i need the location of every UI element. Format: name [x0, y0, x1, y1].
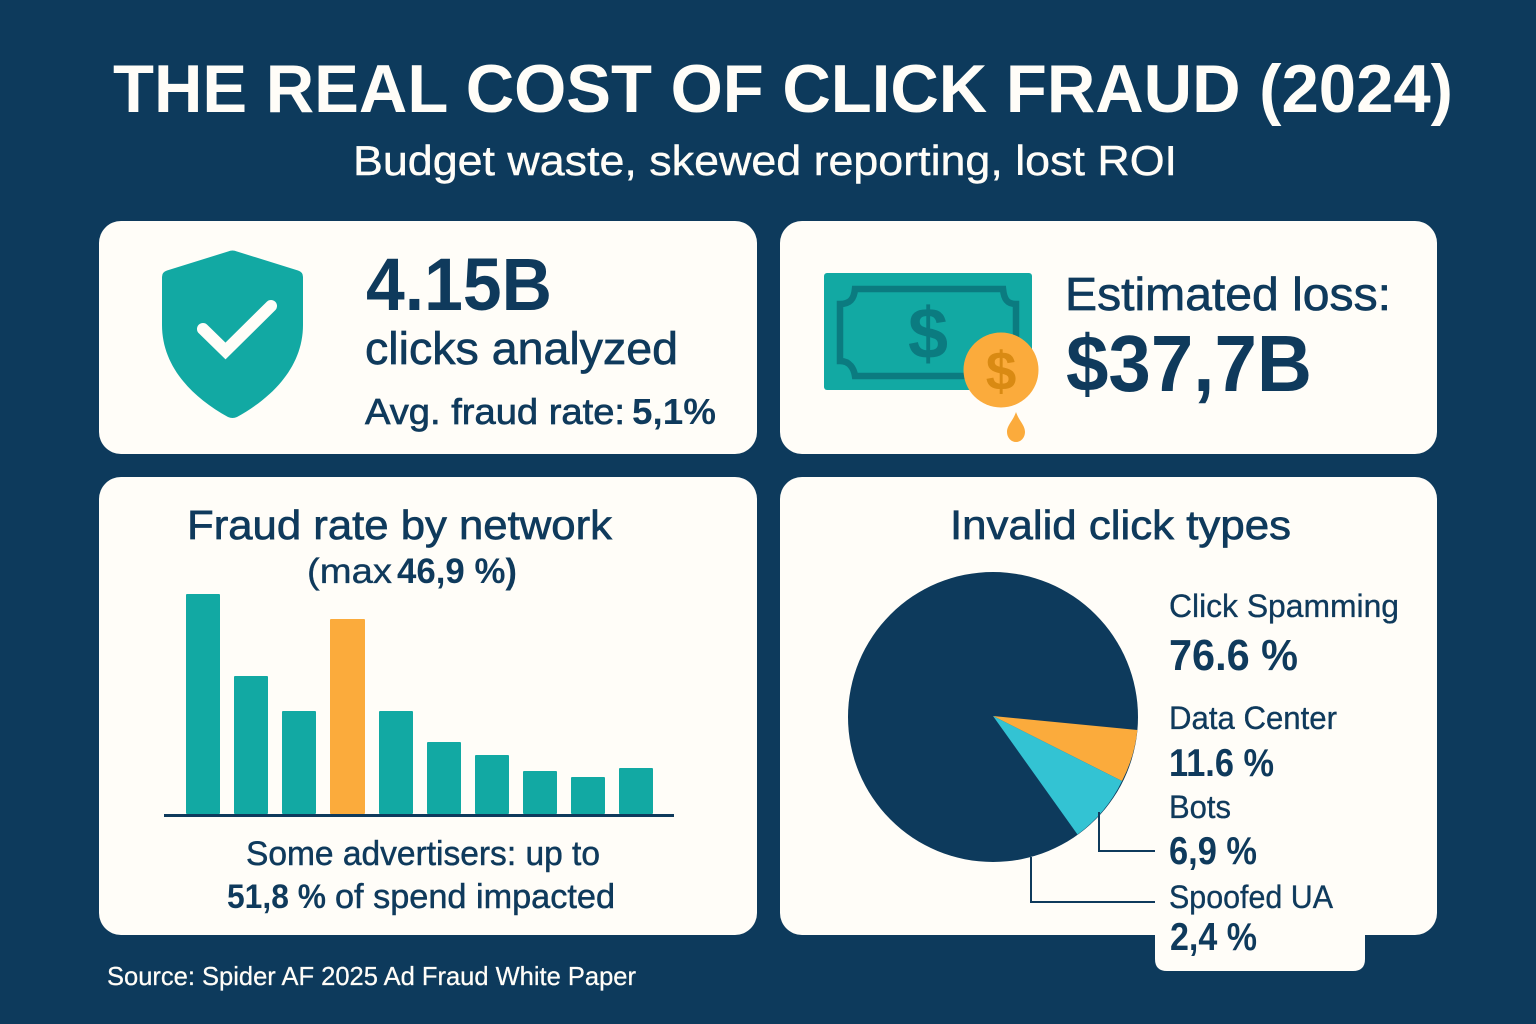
icon: banknote with leaking coin: $	[986, 340, 1016, 402]
stat: 4.15B: 4.15B	[366, 243, 552, 326]
label: click spamming	[1169, 588, 1399, 680]
label: spoofed UA: 2,4 %	[1170, 916, 1257, 959]
heading: Invalid click types	[950, 502, 1291, 548]
panel: fraud rate by network	[99, 477, 757, 935]
leader line: bots	[1099, 812, 1155, 851]
label: bots: Bots	[1169, 789, 1231, 825]
panel: clicks analyzed	[99, 221, 757, 454]
label: bots: 6,9 %	[1169, 830, 1257, 873]
subheading	[307, 552, 517, 591]
subheading: (max	[307, 552, 393, 591]
label: click spamming: 76.6 %	[1169, 631, 1298, 680]
average fraud rate	[365, 391, 716, 432]
label: clicks analyzed: clicks analyzed	[365, 323, 678, 374]
caption: Some advertisers: up to	[246, 835, 600, 873]
label: bots	[1169, 789, 1257, 873]
label: estimated loss: Estimated loss:	[1065, 268, 1391, 320]
label: data center: Data Center	[1169, 700, 1337, 736]
source note: Source: Spider AF 2025 Ad Fraud White Paper	[107, 961, 636, 991]
label tab overflowing panel	[1155, 930, 1365, 971]
panel: estimated loss	[780, 221, 1437, 454]
label: data center: 11.6 %	[1169, 742, 1274, 785]
label: spoofed UA	[1169, 879, 1334, 959]
icon: shield with check	[162, 250, 303, 418]
label: spoofed UA: Spoofed UA	[1169, 879, 1334, 915]
label: click spamming: Click Spamming	[1169, 588, 1399, 624]
caption: 51,8 %	[227, 878, 326, 916]
caption	[227, 835, 615, 916]
heading: Fraud rate by network	[187, 502, 613, 548]
average fraud rate: 5,1%	[632, 391, 716, 432]
bar chart	[164, 594, 674, 817]
icon: banknote with leaking coin: $	[908, 294, 948, 374]
leader line: spoofed UA	[1031, 857, 1155, 902]
subheading: 46,9 %)	[397, 552, 517, 591]
stat: $37,7B: $37,7B	[1066, 319, 1312, 408]
subtitle: Budget waste, skewed reporting, lost ROI	[353, 137, 1177, 184]
icon: banknote with leaking coin	[824, 273, 1038, 442]
title: THE REAL COST OF CLICK FRAUD (2024)	[113, 51, 1453, 127]
average fraud rate: Avg. fraud rate:	[365, 391, 625, 432]
label: data center	[1169, 700, 1337, 785]
pie chart	[848, 572, 1138, 862]
caption: of spend impacted	[335, 878, 615, 916]
panel: invalid click types	[780, 477, 1437, 971]
